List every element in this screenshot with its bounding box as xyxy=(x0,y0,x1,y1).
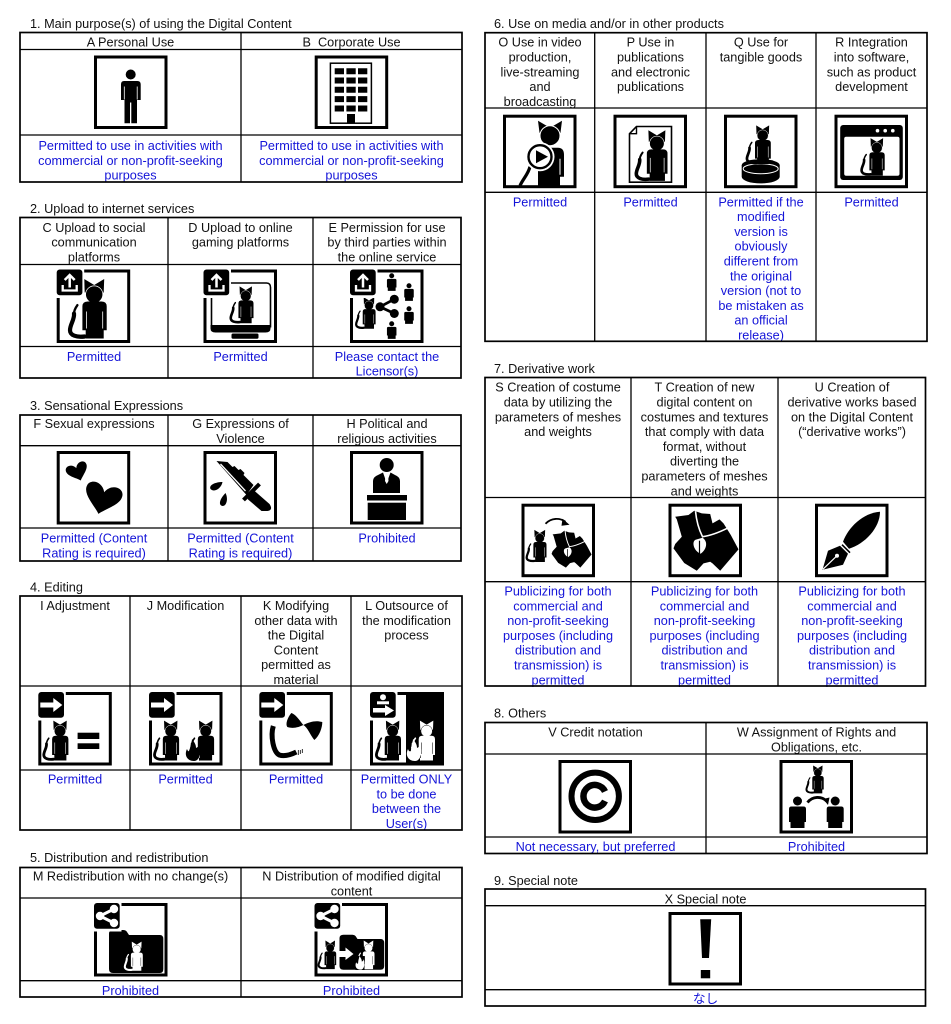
heading: section 5: 5. Distribution and redistribution xyxy=(30,851,208,865)
icon: cat to costume xyxy=(523,505,594,576)
column headers: permitted as xyxy=(261,658,331,672)
panel: 8. Others xyxy=(485,706,927,854)
icon: fountain pen xyxy=(816,505,887,576)
permission values: Prohibited xyxy=(323,984,380,998)
heading: section 4: 4. Editing xyxy=(30,580,83,594)
permission values: Permitted xyxy=(158,772,213,786)
heading: section 8: 8. Others xyxy=(494,706,546,720)
panel: 9. Special note xyxy=(485,874,926,1006)
icon: software window xyxy=(836,116,906,187)
heading: section 6: 6. Use on media and/or in other products xyxy=(494,17,724,31)
column headers: such as product xyxy=(827,65,917,79)
permission values: non-profit-seeking xyxy=(654,614,755,628)
panel: 3. Sensational Expressions xyxy=(20,399,461,561)
permission values: to be done xyxy=(377,787,436,801)
icon: gaming platform upload xyxy=(202,268,276,342)
column headers: P Use in xyxy=(627,36,674,50)
permission values: Permitted (Content xyxy=(41,532,148,546)
column headers: into software, xyxy=(834,50,909,64)
column headers: J Modification xyxy=(147,599,224,613)
column headers: R Integration xyxy=(835,36,908,50)
permission values: transmission) is xyxy=(514,658,602,672)
permission values: Permitted xyxy=(623,195,678,209)
icon: modified folder share xyxy=(313,902,386,975)
column headers: broadcasting xyxy=(504,95,576,109)
column headers: parameters of meshes xyxy=(495,410,621,424)
heading: section 1: 1. Main purpose(s) of using the Digital Content xyxy=(30,17,292,31)
permission values: Permitted to use in activities with xyxy=(259,139,444,153)
permission values: Permitted if the xyxy=(718,195,804,209)
icon: knife xyxy=(205,452,276,523)
column headers: the Digital xyxy=(268,629,324,643)
column headers: communication xyxy=(51,236,137,250)
permission values: transmission) is xyxy=(808,658,896,672)
permission values: Permitted xyxy=(48,772,102,786)
permission values: version (not to xyxy=(721,284,801,298)
icon: copyright xyxy=(560,762,630,832)
column headers: format, without xyxy=(663,440,747,454)
icon: speaker at lectern xyxy=(352,452,422,523)
heading: section 9: 9. Special note xyxy=(494,874,578,888)
column headers: and electronic xyxy=(611,65,691,79)
permission values: commercial and xyxy=(807,599,897,613)
column headers: development xyxy=(835,80,908,94)
permission values: Publicizing for both xyxy=(504,584,612,598)
permission values: non-profit-seeking xyxy=(507,614,609,628)
permission values: purposes (including xyxy=(797,629,907,643)
permission values: commercial and xyxy=(513,599,603,613)
permission value: なし xyxy=(693,992,718,1006)
heading: section 2: 2. Upload to internet services xyxy=(30,202,194,216)
permission values: the original xyxy=(730,269,792,283)
column headers: G Expressions of xyxy=(192,417,289,431)
permission values: purposes (including xyxy=(503,629,613,643)
column headers: publications xyxy=(617,50,684,64)
column headers: S Creation of costume xyxy=(495,381,621,395)
permission values: permitted xyxy=(532,673,584,687)
column headers: the modification xyxy=(362,614,451,628)
column headers: religious activities xyxy=(337,432,437,446)
column headers: and xyxy=(529,80,551,94)
permission values: an official xyxy=(734,314,788,328)
permission values: obviously xyxy=(735,240,788,254)
column headers: by third parties within xyxy=(327,236,447,250)
heading: section 7: 7. Derivative work xyxy=(494,362,595,376)
permission values: Publicizing for both xyxy=(798,584,906,598)
panel: 6. Use on media xyxy=(485,17,927,342)
permission values: distribution and xyxy=(809,644,895,658)
column headers: M Redistribution with no change(s) xyxy=(33,870,228,884)
column headers: H Political and xyxy=(346,417,428,431)
column headers: F Sexual expressions xyxy=(33,417,155,431)
permission values: Rating is required) xyxy=(189,546,292,560)
icon: cat upload xyxy=(55,268,129,342)
icon: third party share xyxy=(348,268,422,342)
permission values: User(s) xyxy=(386,817,427,831)
column headers: parameters of meshes xyxy=(641,470,768,484)
permission values: transmission) is xyxy=(660,658,749,672)
heading: section 3: 3. Sensational Expressions xyxy=(30,399,183,413)
icon: person xyxy=(96,57,166,128)
column headers: Q Use for xyxy=(734,36,789,50)
column headers: W Assignment of Rights and xyxy=(737,726,896,740)
permission values: purposes xyxy=(325,169,378,183)
column headers: production, xyxy=(509,50,571,64)
column headers: derivative works based xyxy=(787,396,917,410)
permission values: Permitted ONLY xyxy=(361,772,453,786)
column headers: and weights xyxy=(671,484,738,498)
column headers: Violence xyxy=(216,432,265,446)
permission values: release) xyxy=(738,328,784,342)
column headers: live-streaming xyxy=(501,65,579,79)
column headers: L Outsource of xyxy=(365,599,448,613)
permission values: Publicizing for both xyxy=(651,584,758,598)
permission values: Licensor(s) xyxy=(356,365,418,379)
column headers: that comply with data xyxy=(645,425,765,439)
column headers: and weights xyxy=(524,425,592,439)
panel: 7. Derivative work xyxy=(485,362,926,687)
column headers: platforms xyxy=(68,250,120,264)
icon: adjustment xyxy=(37,690,110,764)
column headers: data by utilizing the xyxy=(504,396,612,410)
column headers: B Corporate Use xyxy=(302,36,401,50)
icon: video cat xyxy=(504,116,575,187)
permission values: different from xyxy=(724,254,798,268)
permission values: permitted xyxy=(826,673,878,687)
column headers: material xyxy=(273,673,319,687)
column headers: (“derivative works”) xyxy=(798,425,906,439)
permission values: Permitted xyxy=(213,350,268,364)
permission values: commercial and xyxy=(660,599,749,613)
permission values: Permitted xyxy=(844,195,899,209)
permission values: between the xyxy=(372,802,441,816)
permission values: purposes (including xyxy=(649,629,760,643)
permission values: purposes xyxy=(104,169,157,183)
permission values: Permitted to use in activities with xyxy=(38,139,223,153)
icon: exclamation mark xyxy=(670,914,740,984)
column headers: E Permission for use xyxy=(328,221,446,235)
permission values: Prohibited xyxy=(358,532,416,546)
column headers: on the Digital Content xyxy=(791,410,913,424)
column headers: K Modifying xyxy=(263,599,329,613)
permission values: non-profit-seeking xyxy=(801,614,903,628)
permission values: Prohibited xyxy=(788,840,845,854)
icon: bow and tail parts xyxy=(258,690,331,764)
column headers: publications xyxy=(617,80,684,94)
column headers: O Use in video xyxy=(498,36,582,50)
column headers: Content xyxy=(274,643,319,657)
column headers: the online service xyxy=(338,250,436,264)
column headers: U Creation of xyxy=(815,381,890,395)
permission values: be mistaken as xyxy=(718,299,804,313)
permission values: modified xyxy=(737,210,785,224)
column headers: content xyxy=(331,884,373,898)
permission values: distribution and xyxy=(515,644,601,658)
column headers: digital content on xyxy=(657,396,752,410)
permission values: Not necessary, but preferred xyxy=(516,840,675,854)
column headers: process xyxy=(384,629,429,643)
permission values: distribution and xyxy=(661,644,748,658)
column headers: N Distribution of modified digital xyxy=(262,870,441,884)
column headers: gaming platforms xyxy=(192,236,289,250)
permission values: commercial or non-profit-seeking xyxy=(259,154,444,168)
column headers: costumes and textures xyxy=(641,410,768,424)
icon: building xyxy=(316,57,387,128)
permission values: Permitted xyxy=(513,195,567,209)
permission values: Permitted (Content xyxy=(187,532,294,546)
column headers: C Upload to social xyxy=(43,221,145,235)
icon: outsource xyxy=(368,690,444,766)
permission values: commercial or non-profit-seeking xyxy=(38,154,223,168)
permission values: permitted xyxy=(678,673,731,687)
column headers: tangible goods xyxy=(720,50,802,64)
icon: assignment of rights xyxy=(781,762,852,832)
permission values: Prohibited xyxy=(102,984,159,998)
column headers: A Personal Use xyxy=(87,36,174,50)
icon: modification xyxy=(148,690,221,764)
panel: 5. Distribution and redistribution xyxy=(20,851,462,998)
icon: hearts xyxy=(58,452,129,523)
column headers: diverting the xyxy=(670,455,739,469)
icon: folder share xyxy=(92,902,166,975)
column headers: Obligations, etc. xyxy=(771,740,862,754)
permission values: Rating is required) xyxy=(42,546,146,560)
panel: 4. Editing xyxy=(20,580,462,831)
column headers: T Creation of new xyxy=(655,381,755,395)
permission values: Permitted xyxy=(269,772,323,786)
permission values: Permitted xyxy=(67,350,121,364)
permission values: Please contact the xyxy=(335,350,439,364)
column headers: I Adjustment xyxy=(40,599,110,613)
column headers: D Upload to online xyxy=(188,221,293,235)
column headers: V Credit notation xyxy=(548,726,643,740)
icon: costume xyxy=(670,505,740,576)
column headers: other data with xyxy=(254,614,338,628)
icon: figure on pedestal xyxy=(726,116,796,187)
panel: 2. Upload to internet services xyxy=(20,202,461,379)
panel: 1. Main purpose(s) xyxy=(20,17,462,183)
permission values: version is xyxy=(734,225,788,239)
icon: publication xyxy=(615,116,686,187)
column header: X Special note xyxy=(665,892,746,906)
